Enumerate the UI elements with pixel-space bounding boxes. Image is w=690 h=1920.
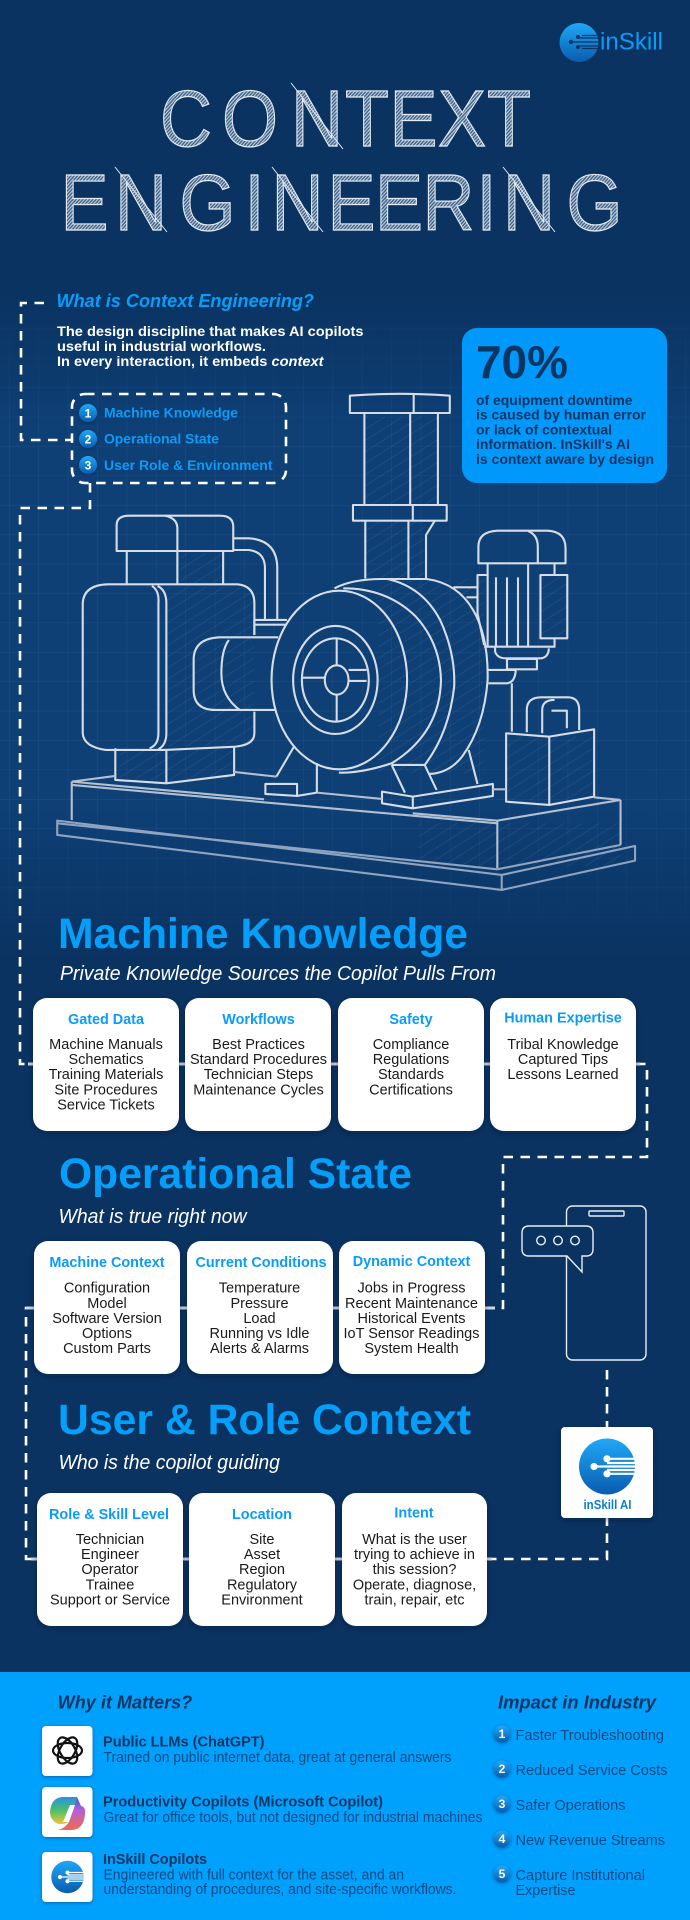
card: safety: Safety: [389, 1012, 433, 1028]
item: inSkill copilots: InSkill Copilots: [103, 1852, 207, 1868]
list item 1: 1: [85, 406, 92, 420]
impact 4: New Revenue Streams: [516, 1833, 665, 1849]
list item 3: User Role & Environment: [104, 458, 273, 473]
card: gated data: Site Procedures: [54, 1082, 158, 1098]
card: dynamic context: Jobs in Progress: [358, 1281, 466, 1297]
card: human expertise: Captured Tips: [518, 1052, 608, 1068]
card: safety: Standards: [378, 1067, 444, 1083]
card: role and skill level: Operator: [81, 1562, 139, 1578]
callout: 70 percent statistic: [462, 328, 667, 483]
item: public LLMs: [103, 1735, 452, 1766]
card: location: Environment: [221, 1592, 303, 1608]
statistic description: is context aware by design: [476, 451, 654, 467]
card: role and skill level: Technician: [76, 1532, 144, 1548]
card: workflows: Technician Steps: [204, 1067, 313, 1083]
dashed connector: list to machine knowledge: [20, 483, 90, 1064]
card: machine context: [34, 1241, 180, 1374]
card: intent: Operate, diagnose,: [353, 1577, 476, 1593]
section: operational state: [26, 1150, 495, 1374]
impact 5: 5: [499, 1867, 506, 1881]
heading: impact in industry: Impact in Industry: [498, 1693, 657, 1713]
intro description: The design discipline that makes AI copilots: [57, 323, 364, 339]
item: public LLMs: Public LLMs (ChatGPT): [103, 1735, 265, 1751]
card: intent: [342, 1493, 487, 1626]
card: gated data: Gated Data: [68, 1012, 145, 1028]
list item 3: 3: [85, 458, 92, 472]
icon: phone with chat bubble: [522, 1206, 646, 1360]
card: current conditions: Running vs Idle: [210, 1326, 309, 1342]
card: workflows: Workflows: [222, 1012, 295, 1028]
card: location: Site: [250, 1532, 274, 1548]
card: gated data: Machine Manuals: [49, 1037, 163, 1053]
impact 1: Faster Troubleshooting: [516, 1728, 664, 1744]
section: user and role context: [31, 1396, 492, 1626]
card: inSkill AI logo: [561, 1427, 653, 1518]
card: gated data: Training Materials: [49, 1067, 163, 1083]
subheading: Who is the copilot guiding: [58, 1452, 280, 1474]
card: dynamic context: System Health: [364, 1341, 459, 1357]
item: inSkill copilots: [103, 1852, 456, 1898]
list item 3: [79, 456, 273, 474]
card: safety: Regulations: [373, 1052, 449, 1068]
intro: what is context engineering: [56, 291, 364, 369]
heading: why it matters: Why it Matters?: [58, 1693, 192, 1713]
card: dynamic context: Recent Maintenance: [345, 1296, 478, 1312]
item: productivity copilots: Great for office tools, but not designed for industrial machines: [104, 1810, 482, 1826]
card: location: Asset: [244, 1547, 280, 1563]
card: machine context: Custom Parts: [63, 1341, 151, 1357]
card: role and skill level: Support or Service: [50, 1592, 170, 1608]
card: intent: this session?: [373, 1562, 456, 1578]
statistic description: [476, 392, 654, 467]
card: location: Region: [239, 1562, 285, 1578]
statistic description: or lack of contextual: [476, 422, 612, 438]
card: safety: [338, 998, 484, 1131]
card: dynamic context: IoT Sensor Readings: [344, 1326, 479, 1342]
heading: operational state: Operational State: [59, 1150, 412, 1198]
impact 4: 4: [499, 1832, 506, 1846]
statistic description: information. InSkill's AI: [476, 436, 630, 452]
subheading: What is true right now: [58, 1206, 248, 1228]
card: machine context: Machine Context: [49, 1255, 165, 1271]
impact list: [494, 1726, 668, 1899]
card: human expertise: Lessons Learned: [507, 1067, 619, 1083]
impact 2: Reduced Service Costs: [516, 1763, 668, 1779]
connector through cards: [31, 1558, 492, 1560]
blueprint grid: [0, 326, 690, 921]
impact 2: 2: [499, 1762, 506, 1776]
list item 2: Operational State: [104, 432, 220, 446]
impact 3: 3: [499, 1797, 506, 1811]
illustration: industrial pump machine: [57, 393, 635, 890]
icon: ChatGPT: [42, 1726, 92, 1776]
card: workflows: Standard Procedures: [190, 1052, 327, 1068]
intro description: useful in industrial workflows.: [57, 338, 266, 354]
item: productivity copilots: Productivity Copilots (Microsoft Copilot): [103, 1795, 383, 1811]
dashed connector: question to list: [21, 303, 72, 440]
subheading: Private Knowledge Sources the Copilot Pulls From: [60, 963, 496, 985]
logo: inSkill: [560, 23, 663, 62]
card: intent: Intent: [394, 1506, 434, 1522]
card: intent: trying to achieve in: [354, 1547, 475, 1563]
connector through cards: [26, 1306, 495, 1310]
card: current conditions: [187, 1241, 333, 1374]
card: gated data: [33, 998, 179, 1131]
card: location: Regulatory: [227, 1577, 298, 1593]
card: role and skill level: Engineer: [81, 1547, 139, 1563]
title: [60, 75, 622, 248]
dashed connector: operational state to user context: [26, 1308, 37, 1559]
card: machine context: Configuration: [64, 1281, 150, 1297]
title: ENGINEERING: [60, 159, 622, 248]
impact 3: Safer Operations: [516, 1798, 626, 1814]
card: gated data: Service Tickets: [57, 1097, 155, 1113]
intro description: [57, 323, 364, 369]
card: current conditions: Pressure: [230, 1296, 289, 1312]
section: machine knowledge: [28, 910, 640, 1131]
heading: machine knowledge: Machine Knowledge: [58, 910, 468, 958]
card: dynamic context: Dynamic Context: [353, 1254, 470, 1270]
panel: why it matters and impact: [0, 1672, 690, 1920]
logo: inSkill: inSkill: [600, 28, 663, 56]
card: current conditions: Temperature: [219, 1281, 300, 1297]
card: safety: Compliance: [373, 1037, 449, 1053]
card: human expertise: Human Expertise: [504, 1010, 622, 1026]
heading: user and role context: User & Role Context: [58, 1396, 471, 1444]
statistic description: of equipment downtime: [476, 392, 633, 408]
dashed connector: user context to inSkill AI: [487, 1518, 607, 1559]
card: location: Location: [232, 1507, 292, 1523]
card: dynamic context: Historical Events: [358, 1311, 465, 1327]
statistic description: is caused by human error: [476, 406, 647, 422]
item: public LLMs: Trained on public internet data, great at general answers: [104, 1750, 452, 1766]
icon: inSkill copilot: [42, 1852, 92, 1902]
dashed connector: machine knowledge to operational state: [484, 1064, 647, 1308]
card: human expertise: Tribal Knowledge: [507, 1037, 619, 1053]
card: safety: Certifications: [369, 1082, 453, 1098]
impact 5: Capture Institutional: [516, 1868, 645, 1884]
card: machine context: Options: [82, 1326, 132, 1342]
connector through cards: [28, 1062, 640, 1066]
card: workflows: Best Practices: [212, 1037, 305, 1053]
impact 1: 1: [499, 1727, 506, 1741]
card: current conditions: Alerts & Alarms: [210, 1341, 309, 1357]
icon: Microsoft Copilot: [42, 1787, 92, 1837]
statistic number: 70%: [476, 336, 568, 388]
card: gated data: Schematics: [69, 1052, 143, 1068]
dashed list box: [72, 394, 286, 483]
card: intent: train, repair, etc: [365, 1592, 464, 1608]
list item 2: [79, 430, 220, 448]
item: inSkill copilots: Engineered with full context for the asset, and an: [104, 1867, 404, 1883]
intro description: In every interaction, it embeds context: [57, 353, 325, 369]
item: productivity copilots: [103, 1795, 482, 1826]
intro heading: What is Context Engineering?: [56, 291, 314, 311]
card: machine context: Software Version: [52, 1311, 162, 1327]
card: inSkill AI logo: inSkill AI: [584, 1497, 632, 1512]
list item 1: [79, 404, 238, 422]
card: role and skill level: [37, 1493, 183, 1626]
card: dynamic context: [339, 1241, 485, 1374]
card: role and skill level: Role & Skill Level: [49, 1507, 169, 1523]
card: intent: What is the user: [362, 1532, 467, 1548]
card: location: [189, 1493, 335, 1626]
card: machine context: Model: [87, 1296, 127, 1312]
card: workflows: [185, 998, 331, 1131]
impact 5: [494, 1866, 645, 1899]
title: CONTEXT: [160, 75, 531, 164]
impact 5: Expertise: [516, 1883, 576, 1899]
card: current conditions: Load: [243, 1311, 276, 1327]
card: workflows: Maintenance Cycles: [193, 1082, 324, 1098]
card: role and skill level: Trainee: [86, 1577, 134, 1593]
item: inSkill copilots: understanding of procedures, and site-specific workflows.: [104, 1882, 456, 1898]
card: human expertise: [490, 998, 636, 1131]
card: current conditions: Current Conditions: [195, 1255, 327, 1271]
list item 2: 2: [85, 432, 92, 446]
list item 1: Machine Knowledge: [104, 406, 238, 420]
dashed connector: phone to inSkill AI: [606, 1370, 608, 1427]
